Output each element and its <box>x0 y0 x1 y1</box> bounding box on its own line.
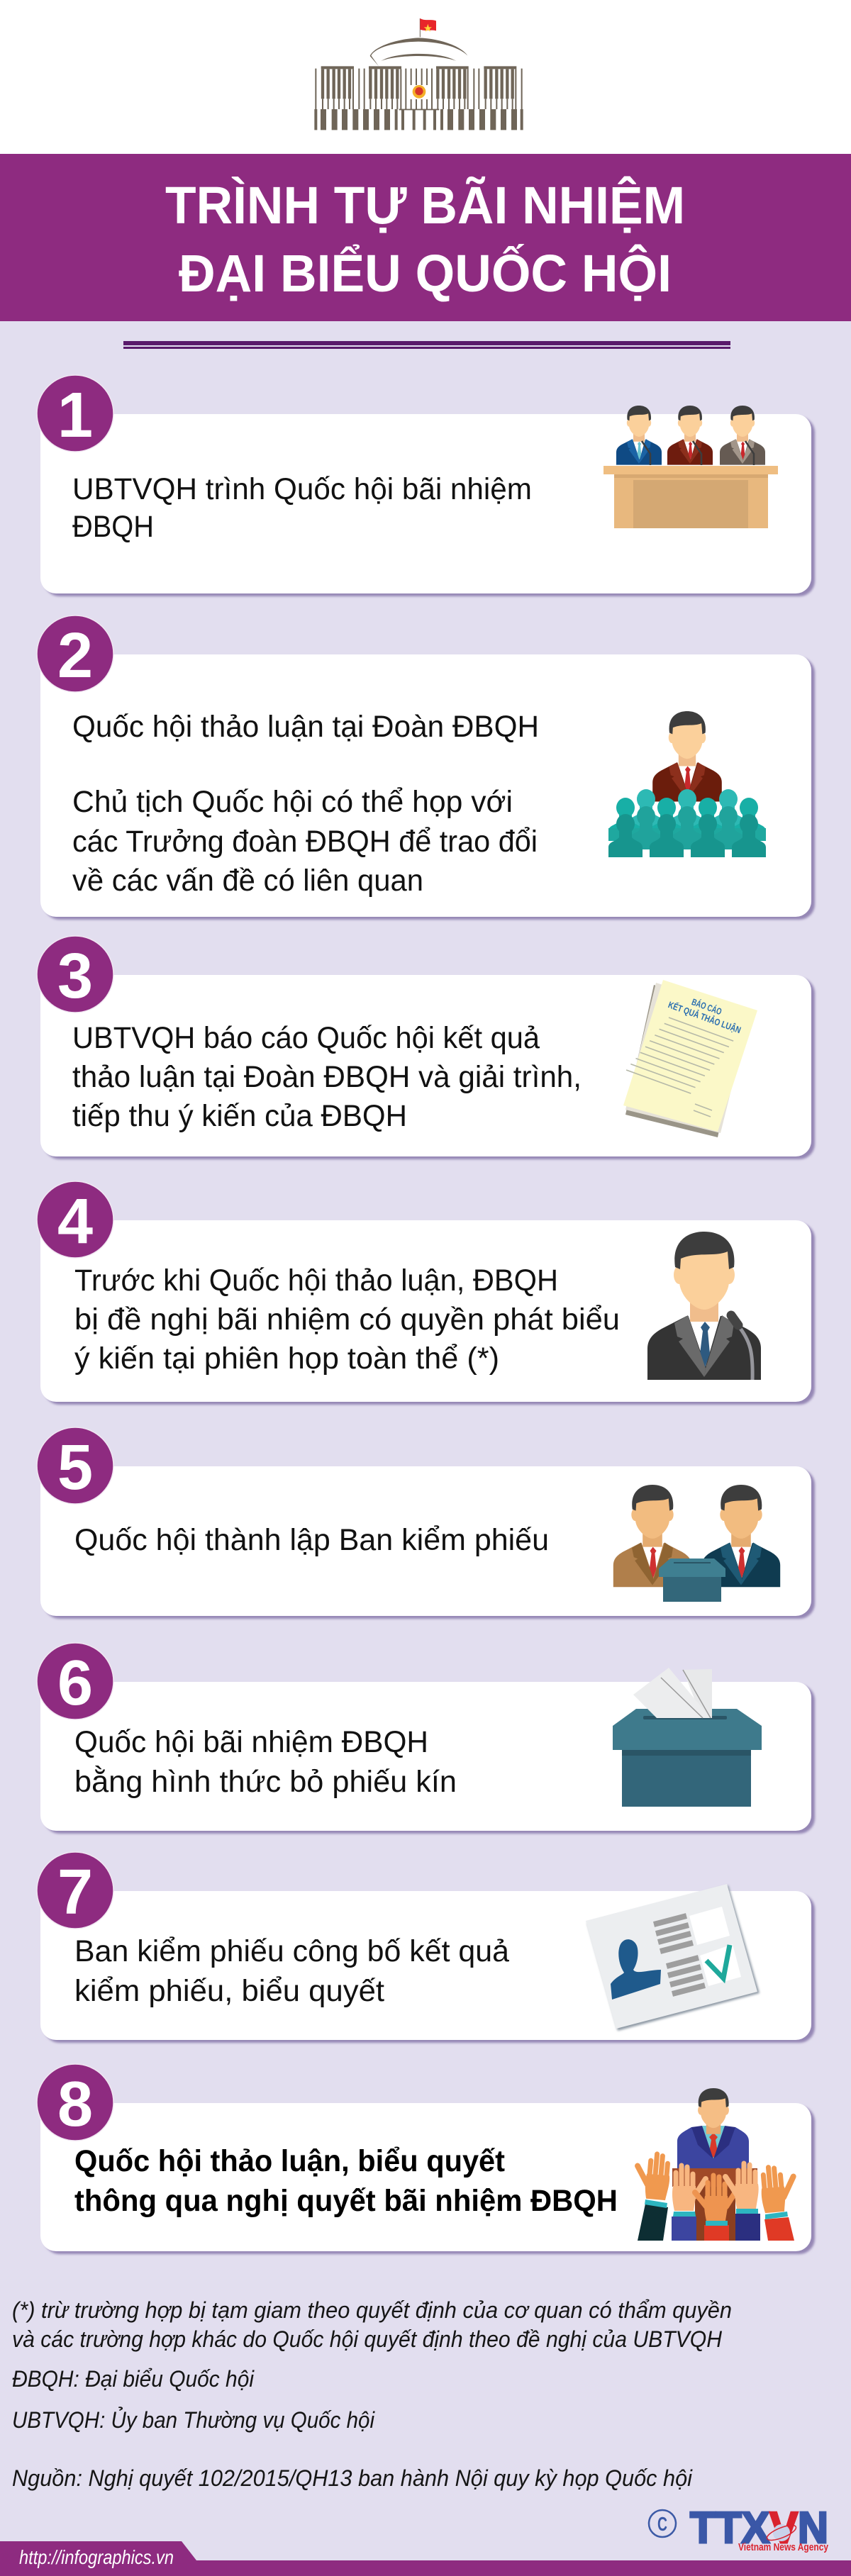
step 2 text: các Trưởng đoàn ĐBQH để trao đổi <box>72 825 538 859</box>
footer bar with URL <box>0 2541 851 2576</box>
step number 3 <box>37 936 113 1013</box>
step 8 text: Quốc hội thảo luận, biểu quyết <box>74 2144 505 2178</box>
icon: leader and crowd <box>608 711 766 857</box>
step number 8: 8 <box>57 2069 93 2140</box>
step number 8 <box>37 2064 113 2141</box>
step 3 text: tiếp thu ý kiến của ĐBQH <box>72 1099 407 1133</box>
panel: step 6 <box>37 1643 815 1834</box>
panel: step 1 <box>37 375 815 596</box>
footer bar with URL: http://infographics.vn <box>19 2546 174 2568</box>
step number 4: 4 <box>57 1186 93 1257</box>
step 5 text: Quốc hội thành lập Ban kiểm phiếu <box>74 1523 549 1557</box>
step number 7: 7 <box>57 1857 93 1928</box>
step 2 text: Quốc hội thảo luận tại Đoàn ĐBQH <box>72 710 539 744</box>
icon: chair and raised hands <box>635 2088 796 2241</box>
icon: ballot box with papers <box>613 1668 762 1807</box>
footnotes: (*) trừ trường hợp bị tạm giam theo quyết định của cơ quan có thẩm quyền <box>12 2297 732 2323</box>
step number 1: 1 <box>57 380 93 451</box>
footnotes: ĐBQH: Đại biểu Quốc hội <box>12 2366 255 2392</box>
step 6 text: Quốc hội bãi nhiệm ĐBQH <box>74 1725 428 1759</box>
step 1 text: UBTVQH trình Quốc hội bãi nhiệm <box>72 472 532 506</box>
step 8 text: thông qua nghị quyết bãi nhiệm ĐBQH <box>74 2184 618 2218</box>
source note: Nguồn: Nghị quyết 102/2015/QH13 ban hành Nội quy kỳ họp Quốc hội <box>12 2465 693 2491</box>
title banner <box>0 154 851 321</box>
icon: delegate speaking at microphone <box>647 1232 761 1380</box>
step number 1 <box>37 375 113 452</box>
icon: report document: KẾT QUẢ THẢO LUẬN <box>667 999 742 1035</box>
step 7 text: Ban kiểm phiếu công bố kết quả <box>74 1934 509 1968</box>
step 3 text <box>72 1021 582 1133</box>
step 6 text: bằng hình thức bỏ phiếu kín <box>74 1765 457 1799</box>
step 4 text: Trước khi Quốc hội thảo luận, ĐBQH <box>74 1264 558 1298</box>
step 2 text: Chủ tịch Quốc hội có thể họp với <box>72 785 513 819</box>
step 3 text: UBTVQH báo cáo Quốc hội kết quả <box>72 1021 540 1055</box>
logo: TTXVN: TTXVN <box>690 2504 828 2553</box>
icon: ballot card with tick <box>586 1884 760 2031</box>
step 2 text: về các vấn đề có liên quan <box>72 864 423 898</box>
step number 6: 6 <box>57 1648 93 1719</box>
step 1 text: ĐBQH <box>72 510 154 544</box>
panel: step 4 <box>37 1181 815 1405</box>
logo: TTXVN: C <box>657 2513 667 2535</box>
step 8 text <box>74 2144 618 2218</box>
step number 5 <box>37 1427 113 1504</box>
step number 2: 2 <box>57 620 93 691</box>
icon: report document: BÁO CÁO <box>690 996 723 1017</box>
step number 2 <box>37 615 113 692</box>
step 4 text: ý kiến tại phiên họp toàn thể (*) <box>74 1342 499 1376</box>
footnotes <box>12 2297 732 2433</box>
step 4 text: bị đề nghị bãi nhiệm có quyền phát biểu <box>74 1303 620 1337</box>
step 7 text <box>74 1934 509 2008</box>
icon: two delegates with ballot box <box>613 1485 780 1602</box>
step 6 text <box>74 1725 457 1799</box>
panel: step 8 <box>37 2064 815 2254</box>
panel: step 7 <box>37 1852 815 2043</box>
step number 7 <box>37 1852 113 1929</box>
panel: step 3 <box>37 936 815 1159</box>
footnotes: UBTVQH: Ủy ban Thường vụ Quốc hội <box>12 2407 375 2433</box>
icon: report document <box>623 980 757 1137</box>
icon: three delegates at a table <box>604 406 778 528</box>
step number 5: 5 <box>57 1432 93 1503</box>
title line 2: ĐẠI BIỂU QUỐC HỘI <box>179 244 672 303</box>
step 7 text: kiểm phiếu, biểu quyết <box>74 1974 384 2008</box>
logo: TTXVN: Vietnam News Agency <box>738 2541 829 2553</box>
title divider <box>123 341 730 349</box>
icon: national assembly building <box>316 18 522 130</box>
panel: step 5 <box>37 1427 815 1619</box>
footnotes: và các trường hợp khác do Quốc hội quyết định theo đề nghị của UBTVQH <box>12 2326 723 2352</box>
step 4 text <box>74 1264 620 1376</box>
step 1 text <box>72 472 532 544</box>
title line 1: TRÌNH TỰ BÃI NHIỆM <box>165 176 685 235</box>
step number 6 <box>37 1643 113 1719</box>
step 2 text <box>72 710 539 898</box>
step number 3: 3 <box>57 941 93 1012</box>
step 3 text: thảo luận tại Đoàn ĐBQH và giải trình, <box>72 1060 582 1094</box>
step number 4 <box>37 1181 113 1258</box>
panel: step 2 <box>37 615 815 920</box>
top white header area <box>0 0 851 154</box>
